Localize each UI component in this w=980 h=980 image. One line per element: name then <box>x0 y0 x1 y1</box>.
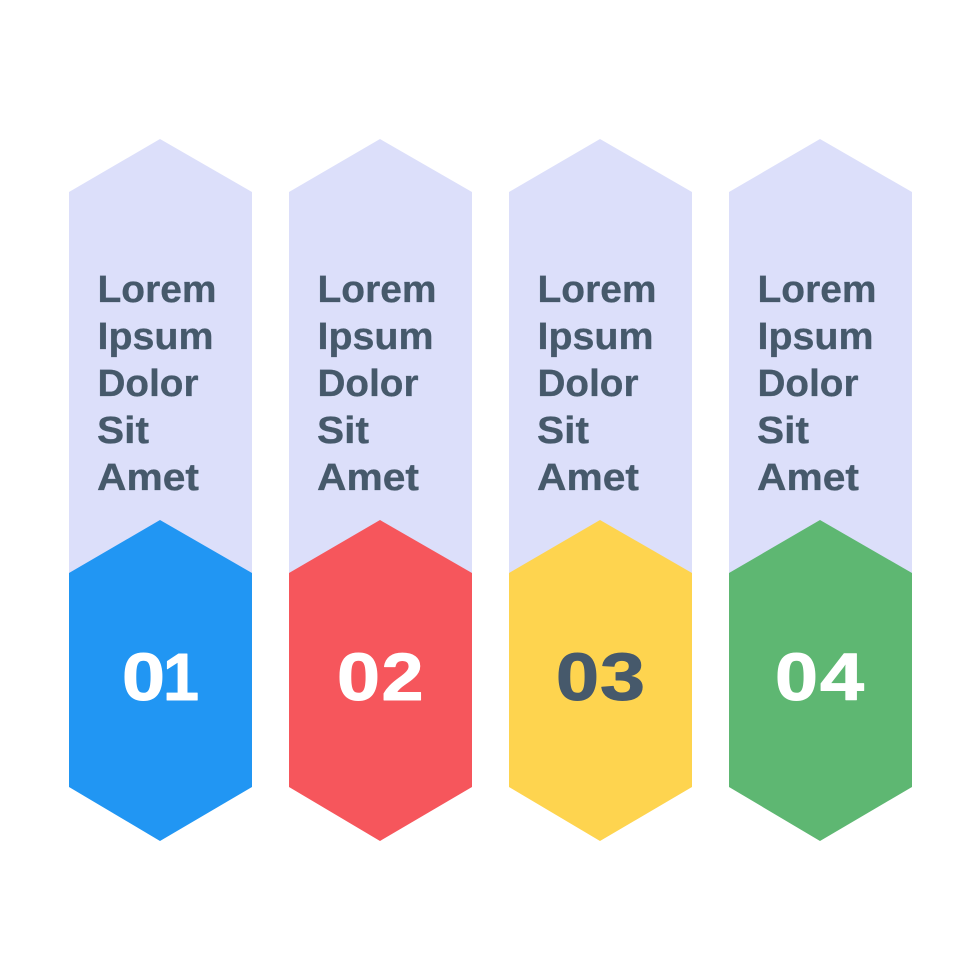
number 01: 1 <box>163 640 199 715</box>
text block: column 4: Sit <box>757 410 809 452</box>
number 03: 3 <box>600 640 645 715</box>
text block: column 1: Dolor <box>98 363 199 405</box>
number 02 <box>337 640 424 715</box>
text block: column 2: Ipsum <box>318 316 434 358</box>
text block: column 2: Lorem <box>318 269 436 311</box>
text block: column 3: Dolor <box>538 363 639 405</box>
text block: column 4: Ipsum <box>758 316 874 358</box>
number 03 <box>556 640 645 715</box>
text block: column 2: Dolor <box>318 363 419 405</box>
text block: column 1 <box>97 269 216 499</box>
text block: column 4: Amet <box>757 457 859 499</box>
text block: column 4: Dolor <box>758 363 859 405</box>
number 04: 0 <box>775 640 818 715</box>
text block: column 3: Sit <box>537 410 589 452</box>
hexagon: red <box>289 520 472 841</box>
panel: column 4 background <box>729 139 912 600</box>
text block: column 2: Sit <box>317 410 369 452</box>
column 2 <box>289 139 472 841</box>
column 1 <box>69 139 252 841</box>
number 04 <box>775 640 864 715</box>
number 02: 0 <box>337 640 380 715</box>
hexagon: blue <box>69 520 252 841</box>
number 01 <box>122 640 199 715</box>
column 4 <box>729 139 912 841</box>
panel: column 2 background <box>289 139 472 600</box>
text block: column 2 <box>317 269 436 499</box>
number 01: 0 <box>122 640 165 715</box>
text block: column 3: Lorem <box>538 269 656 311</box>
text block: column 4: Lorem <box>758 269 876 311</box>
text block: column 1: Lorem <box>98 269 216 311</box>
text block: column 3: Ipsum <box>538 316 654 358</box>
number 03: 0 <box>556 640 599 715</box>
number 02: 2 <box>382 640 424 715</box>
number 04: 4 <box>820 640 864 715</box>
text block: column 1: Ipsum <box>98 316 214 358</box>
text block: column 3: Amet <box>537 457 639 499</box>
column 3 <box>509 139 692 841</box>
panel: column 3 background <box>509 139 692 600</box>
text block: column 4 <box>757 269 876 499</box>
text block: column 1: Amet <box>97 457 199 499</box>
hexagon: yellow <box>509 520 692 841</box>
panel: column 1 background <box>69 139 252 600</box>
hexagon: green <box>729 520 912 841</box>
text block: column 3 <box>537 269 656 499</box>
text block: column 2: Amet <box>317 457 419 499</box>
text block: column 1: Sit <box>97 410 149 452</box>
